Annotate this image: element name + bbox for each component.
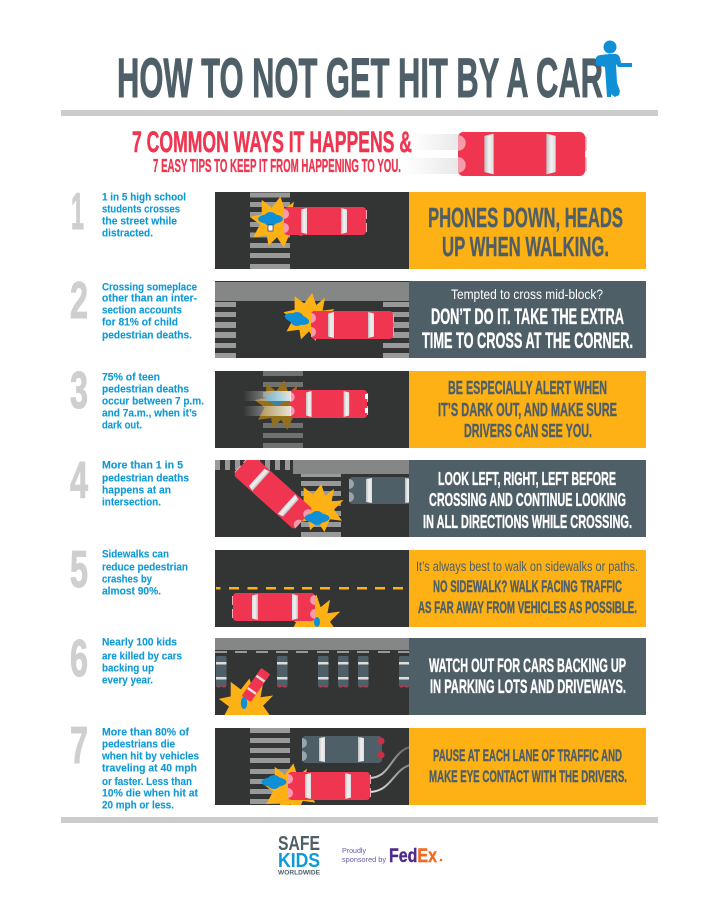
sponsor credit: sponsored by [342, 855, 386, 864]
row 2 statistic: Crossing someplace [102, 282, 197, 294]
row 6 statistic: backing up [102, 662, 154, 674]
row 1 statistic: 1 in 5 high school [102, 192, 186, 204]
row 3 tip: DRIVERS CAN SEE YOU. [464, 421, 592, 441]
row 1 statistic: distracted. [102, 228, 153, 240]
row 6 statistic: every year. [102, 674, 153, 686]
row 6 statistic: 6 [70, 630, 88, 688]
row 5 tip [409, 550, 646, 627]
subtitle line 1: 7 COMMON WAYS IT HAPPENS & [132, 126, 412, 159]
row 6 statistic: are killed by cars [102, 650, 182, 662]
row 3 statistic: pedestrian deaths [102, 384, 189, 396]
Safe Kids Worldwide logo: KIDS [278, 850, 320, 872]
row 3 illustration: dark street with headlights [215, 371, 409, 448]
row 7 statistic: when hit by vehicles [101, 750, 199, 762]
row 1 statistic: students crosses [102, 204, 180, 216]
row 5 statistic [70, 541, 188, 599]
row 7 statistic: 20 mph or less. [102, 800, 174, 812]
row 4 statistic: More than 1 in 5 [102, 460, 183, 472]
row 2 statistic: section accounts [102, 304, 182, 316]
row 6 illustration: parking lot [215, 638, 409, 715]
row 2 tip: Tempted to cross mid-block? [451, 286, 603, 302]
row 5 statistic: crashes by [102, 574, 153, 586]
row 7 illustration: speeding car with skid marks [215, 728, 409, 805]
row 1 tip [409, 192, 646, 269]
row 2 statistic: for 81% of child [102, 316, 178, 328]
row 4 tip [409, 460, 646, 537]
row 5 statistic: almost 90%. [102, 586, 161, 598]
Safe Kids Worldwide logo [278, 833, 321, 876]
row 2 tip [409, 281, 646, 358]
row 5 statistic: reduce pedestrian [102, 562, 188, 574]
row 4 statistic: intersection. [102, 496, 161, 508]
row 3 statistic [70, 362, 204, 432]
top divider [61, 110, 658, 116]
Safe Kids Worldwide logo: SAFE [278, 833, 320, 855]
row 1 statistic [71, 183, 186, 241]
row 1 statistic: 1 [71, 183, 84, 241]
FedEx logo: FedEx [389, 846, 437, 867]
row 1 tip: UP WHEN WALKING. [442, 231, 609, 262]
row 5 statistic: 5 [70, 541, 88, 599]
row 2 illustration: mid-block crossing [215, 281, 409, 358]
row 7 statistic: pedestrians die [102, 738, 175, 750]
sponsor credit: Proudly [342, 846, 366, 855]
row 4 statistic: 4 [70, 452, 88, 510]
row 3 statistic: and 7a.m., when it’s [102, 408, 197, 420]
row 5 tip: It’s always best to walk on sidewalks or paths. [416, 559, 638, 574]
row 3 statistic: 3 [70, 362, 88, 420]
row 4 statistic: pedestrian deaths [102, 472, 189, 484]
row 5 statistic: Sidewalks can [102, 548, 169, 560]
row 7 statistic: 7 [70, 717, 88, 775]
row 2 statistic [70, 272, 197, 342]
row 7 statistic [70, 717, 199, 812]
row 3 tip [409, 371, 646, 448]
row 6 statistic: Nearly 100 kids [102, 636, 177, 648]
subtitle line 2: 7 EASY TIPS TO KEEP IT FROM HAPPENING TO YOU. [153, 156, 401, 176]
bottom divider [61, 817, 658, 823]
row 7 tip [409, 728, 646, 805]
row 5 illustration: road with no sidewalk [215, 550, 409, 627]
row 3 statistic: 75% of teen [102, 372, 160, 384]
icon: speeding header car [404, 132, 587, 176]
row 1 illustration: distracted pedestrian at crosswalk [215, 192, 409, 269]
row 2 statistic: pedestrian deaths. [102, 330, 192, 342]
sponsor credit [342, 846, 386, 864]
row 2 statistic: 2 [70, 272, 88, 330]
row 7 statistic: traveling at 40 mph [102, 762, 197, 774]
row 7 statistic: or faster. Less than [102, 776, 192, 788]
row 3 statistic: occur between 7 p.m. [102, 396, 204, 408]
row 7 statistic: More than 80% of [102, 726, 189, 738]
row 6 tip [409, 638, 646, 715]
row 6 statistic [70, 630, 182, 688]
icon: person leaning on title [596, 40, 632, 97]
row 1 statistic: the street while [102, 216, 177, 228]
Safe Kids Worldwide logo: WORLDWIDE [278, 870, 321, 876]
row 4 statistic [70, 452, 189, 510]
row 7 statistic: 10% die when hit at [102, 788, 198, 800]
row 4 statistic: happens at an [102, 484, 171, 496]
row 3 tip: BE ESPECIALLY ALERT WHEN [448, 378, 607, 398]
row 2 statistic: other than an inter- [102, 292, 197, 304]
row 4 illustration: turning car at intersection [215, 460, 409, 537]
row 3 statistic: dark out. [102, 420, 142, 432]
